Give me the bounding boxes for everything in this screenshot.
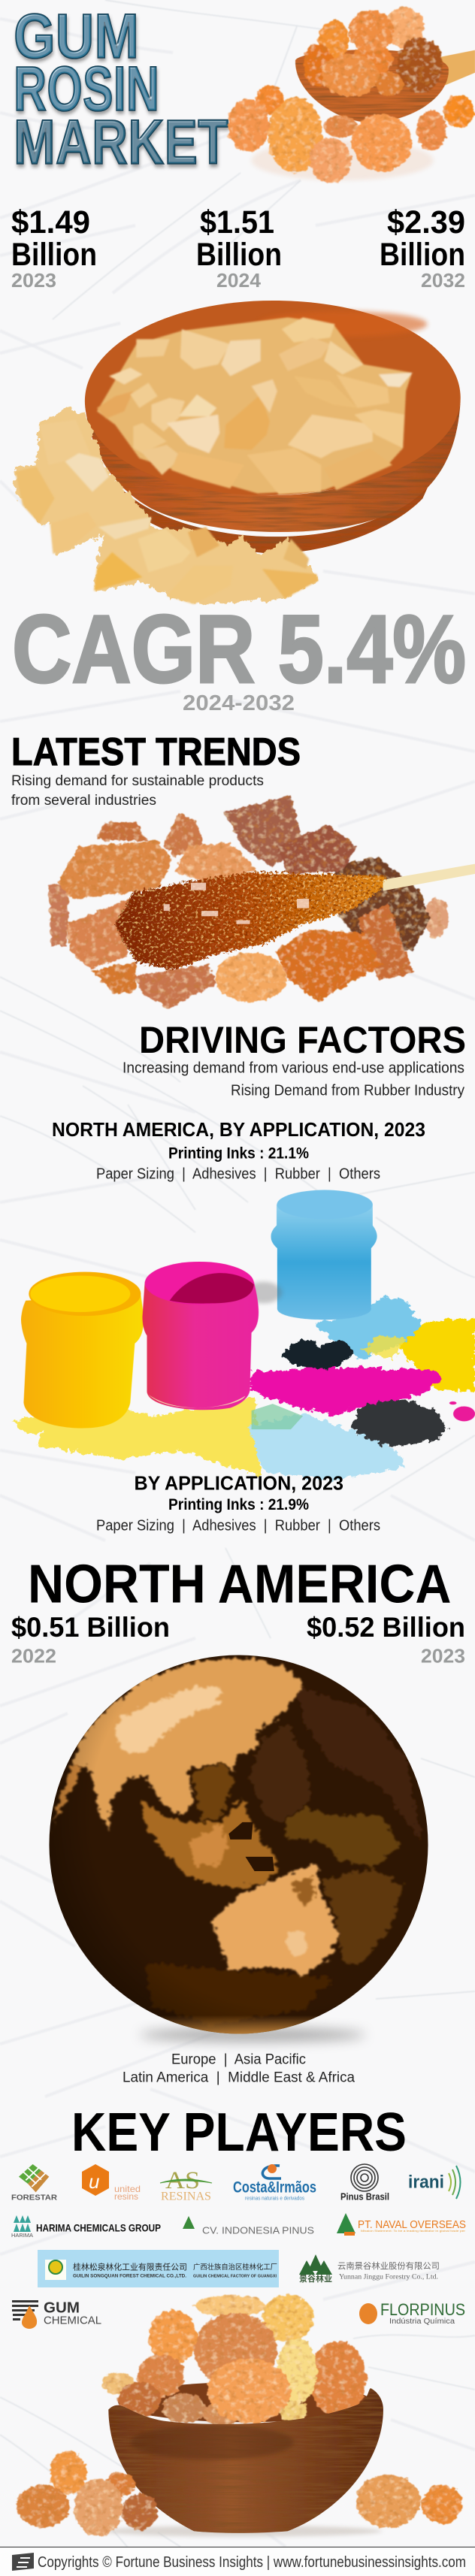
logo: Irani <box>408 2166 460 2199</box>
section: North America by application <box>52 1118 425 1183</box>
stat: 2032 value: $2.39 <box>387 204 465 240</box>
stat: 2024 value: Billion <box>196 237 282 273</box>
logo: Yunnan Jinggu Forestry: 云南景谷林业股份有限公司 <box>337 2260 440 2271</box>
section: driving factors: Increasing demand from various end-use applications <box>123 1060 464 1076</box>
logo: Pinus Brasil <box>340 2164 389 2203</box>
logo: CV Indonesia Pinus: CV. INDONESIA PINUS <box>202 2225 314 2236</box>
section: global by application: Paper Sizing | Adhesives | Rubber | Others <box>96 1517 380 1534</box>
title <box>14 1 228 177</box>
stat: North America 2022 <box>11 1612 170 1667</box>
logo: Harima Chemicals Group: HARIMA <box>11 2233 33 2239</box>
stat: 2023 value: Billion <box>11 237 97 273</box>
logo: CV Indonesia Pinus <box>183 2216 314 2236</box>
logo: PT Naval Overseas: PT. NAVAL OVERSEAS <box>358 2218 466 2231</box>
stat: North America 2023: 2023 <box>421 1644 465 1667</box>
stat: 2024 value <box>196 204 282 292</box>
regions list: Europe | Asia Pacific <box>171 2051 306 2067</box>
logo: Florpinus: Indústria Química <box>389 2317 455 2326</box>
stat: North America 2023 <box>307 1612 465 1667</box>
logo: Forestar <box>11 2164 58 2203</box>
image: amber rosin crystals with stick <box>48 796 475 1008</box>
logo: Yunnan Jinggu Forestry: Yunnan Jinggu Forestry Co., Ltd. <box>339 2272 438 2280</box>
section: global by application <box>96 1471 380 1534</box>
logo: Pinus Brasil: Pinus Brasil <box>340 2191 389 2203</box>
regions list <box>123 2051 355 2086</box>
logo: United Resins: u <box>89 2170 99 2193</box>
logo: PT Naval Overseas <box>337 2213 466 2236</box>
logo: Yunnan Jinggu Forestry <box>299 2254 440 2284</box>
section: latest trends: LATEST TRENDS <box>11 730 301 774</box>
regions list: Latin America | Middle East & Africa <box>123 2070 355 2086</box>
section: driving factors: DRIVING FACTORS <box>139 1019 466 1061</box>
logo: Guilin Songquan banner: 桂林松泉林化工业有限责任公司 <box>73 2262 187 2272</box>
image: gum rosin in wooden bowl <box>17 2294 462 2537</box>
stat: 2032 value <box>380 204 465 292</box>
section: driving factors <box>123 1019 466 1099</box>
image: amber globe <box>49 1655 428 2042</box>
logo: Harima Chemicals Group: HARIMA CHEMICALS GROUP <box>36 2221 161 2233</box>
stat: North America 2023: $0.52 Billion <box>307 1612 465 1643</box>
image: rosin flakes on wooden plate <box>15 301 461 604</box>
stat: North America 2022: 2022 <box>11 1644 56 1667</box>
stat: 2024 value: 2024 <box>216 269 262 292</box>
image: gum rosin on wooden spoon <box>228 8 475 183</box>
logo: Gum Chemical <box>12 2300 101 2329</box>
title: ROSIN <box>14 53 159 124</box>
section: North America by application: Printing Inks : 21.1% <box>168 1144 309 1162</box>
section: North America by application: NORTH AMERICA, BY APPLICATION, 2023 <box>52 1118 425 1141</box>
logo: Florpinus <box>359 2300 465 2326</box>
image: printing ink jars and spills <box>12 1190 475 1480</box>
logo: Guilin Songquan banner: GUILIN CHEMICAL FACTORY OF GUANGXI <box>193 2274 277 2278</box>
heading: North America: NORTH AMERICA <box>28 1554 451 1614</box>
heading: key players: KEY PLAYERS <box>71 2103 407 2163</box>
stat: 2023 value: $1.49 <box>11 204 90 240</box>
logo: AS Resinas <box>160 2167 212 2203</box>
logo: Florpinus: FLORPINUS <box>380 2300 465 2319</box>
logo: United Resins: united <box>114 2184 141 2194</box>
section: global by application: BY APPLICATION, 2023 <box>134 1471 343 1494</box>
logo: Costa & Irmãos: Costa&Irmãos <box>233 2179 316 2197</box>
section: driving factors: Rising Demand from Rubber Industry <box>231 1082 464 1099</box>
stat: North America 2022: $0.51 Billion <box>11 1612 170 1643</box>
logo: PT Naval Overseas: Mission Statement: To be a leading facilitator in global trade per <box>361 2229 466 2233</box>
logo: Costa & Irmãos <box>233 2164 316 2202</box>
section: North America by application: Paper Sizing | Adhesives | Rubber | Others <box>96 1166 380 1183</box>
logo: Guilin Songquan banner <box>38 2250 279 2287</box>
section: latest trends: from several industries <box>11 793 156 809</box>
logo: Harima Chemicals Group <box>11 2215 161 2239</box>
CAGR figure: 2024-2032 <box>183 691 295 715</box>
stat: 2024 value: $1.51 <box>200 204 274 240</box>
logo: Gum Chemical: GUM <box>44 2300 80 2317</box>
section: latest trends <box>11 730 301 809</box>
logo: Gum Chemical: CHEMICAL <box>44 2314 101 2327</box>
stat: 2023 value <box>11 204 97 292</box>
logo: United Resins: resins <box>114 2191 138 2202</box>
stat: 2023 value: 2023 <box>11 269 56 292</box>
stat: 2032 value: 2032 <box>421 269 465 292</box>
section: latest trends: Rising demand for sustainable products <box>11 773 264 789</box>
title: GUM <box>14 1 139 71</box>
logo: Yunnan Jinggu Forestry: 景谷林业 <box>299 2273 332 2284</box>
logo: Forestar: FORESTAR <box>11 2194 58 2203</box>
logo: AS Resinas: AS <box>165 2167 200 2194</box>
footer <box>0 2547 475 2576</box>
section: global by application: Printing Inks : 21.9% <box>168 1496 309 1513</box>
title: MARKET <box>14 107 228 177</box>
logo: AS Resinas: RESINAS <box>161 2191 211 2203</box>
logo: Guilin Songquan banner: 广西壮族自治区桂林化工厂 <box>193 2263 277 2272</box>
logo: Irani: irani <box>408 2172 444 2193</box>
logo: Costa & Irmãos: resinas naturais e derivados <box>245 2197 304 2202</box>
logo: Guilin Songquan banner: GUILIN SONGQUAN FOREST CHEMICAL CO.,LTD. <box>73 2274 186 2279</box>
logo: United Resins <box>82 2164 141 2202</box>
